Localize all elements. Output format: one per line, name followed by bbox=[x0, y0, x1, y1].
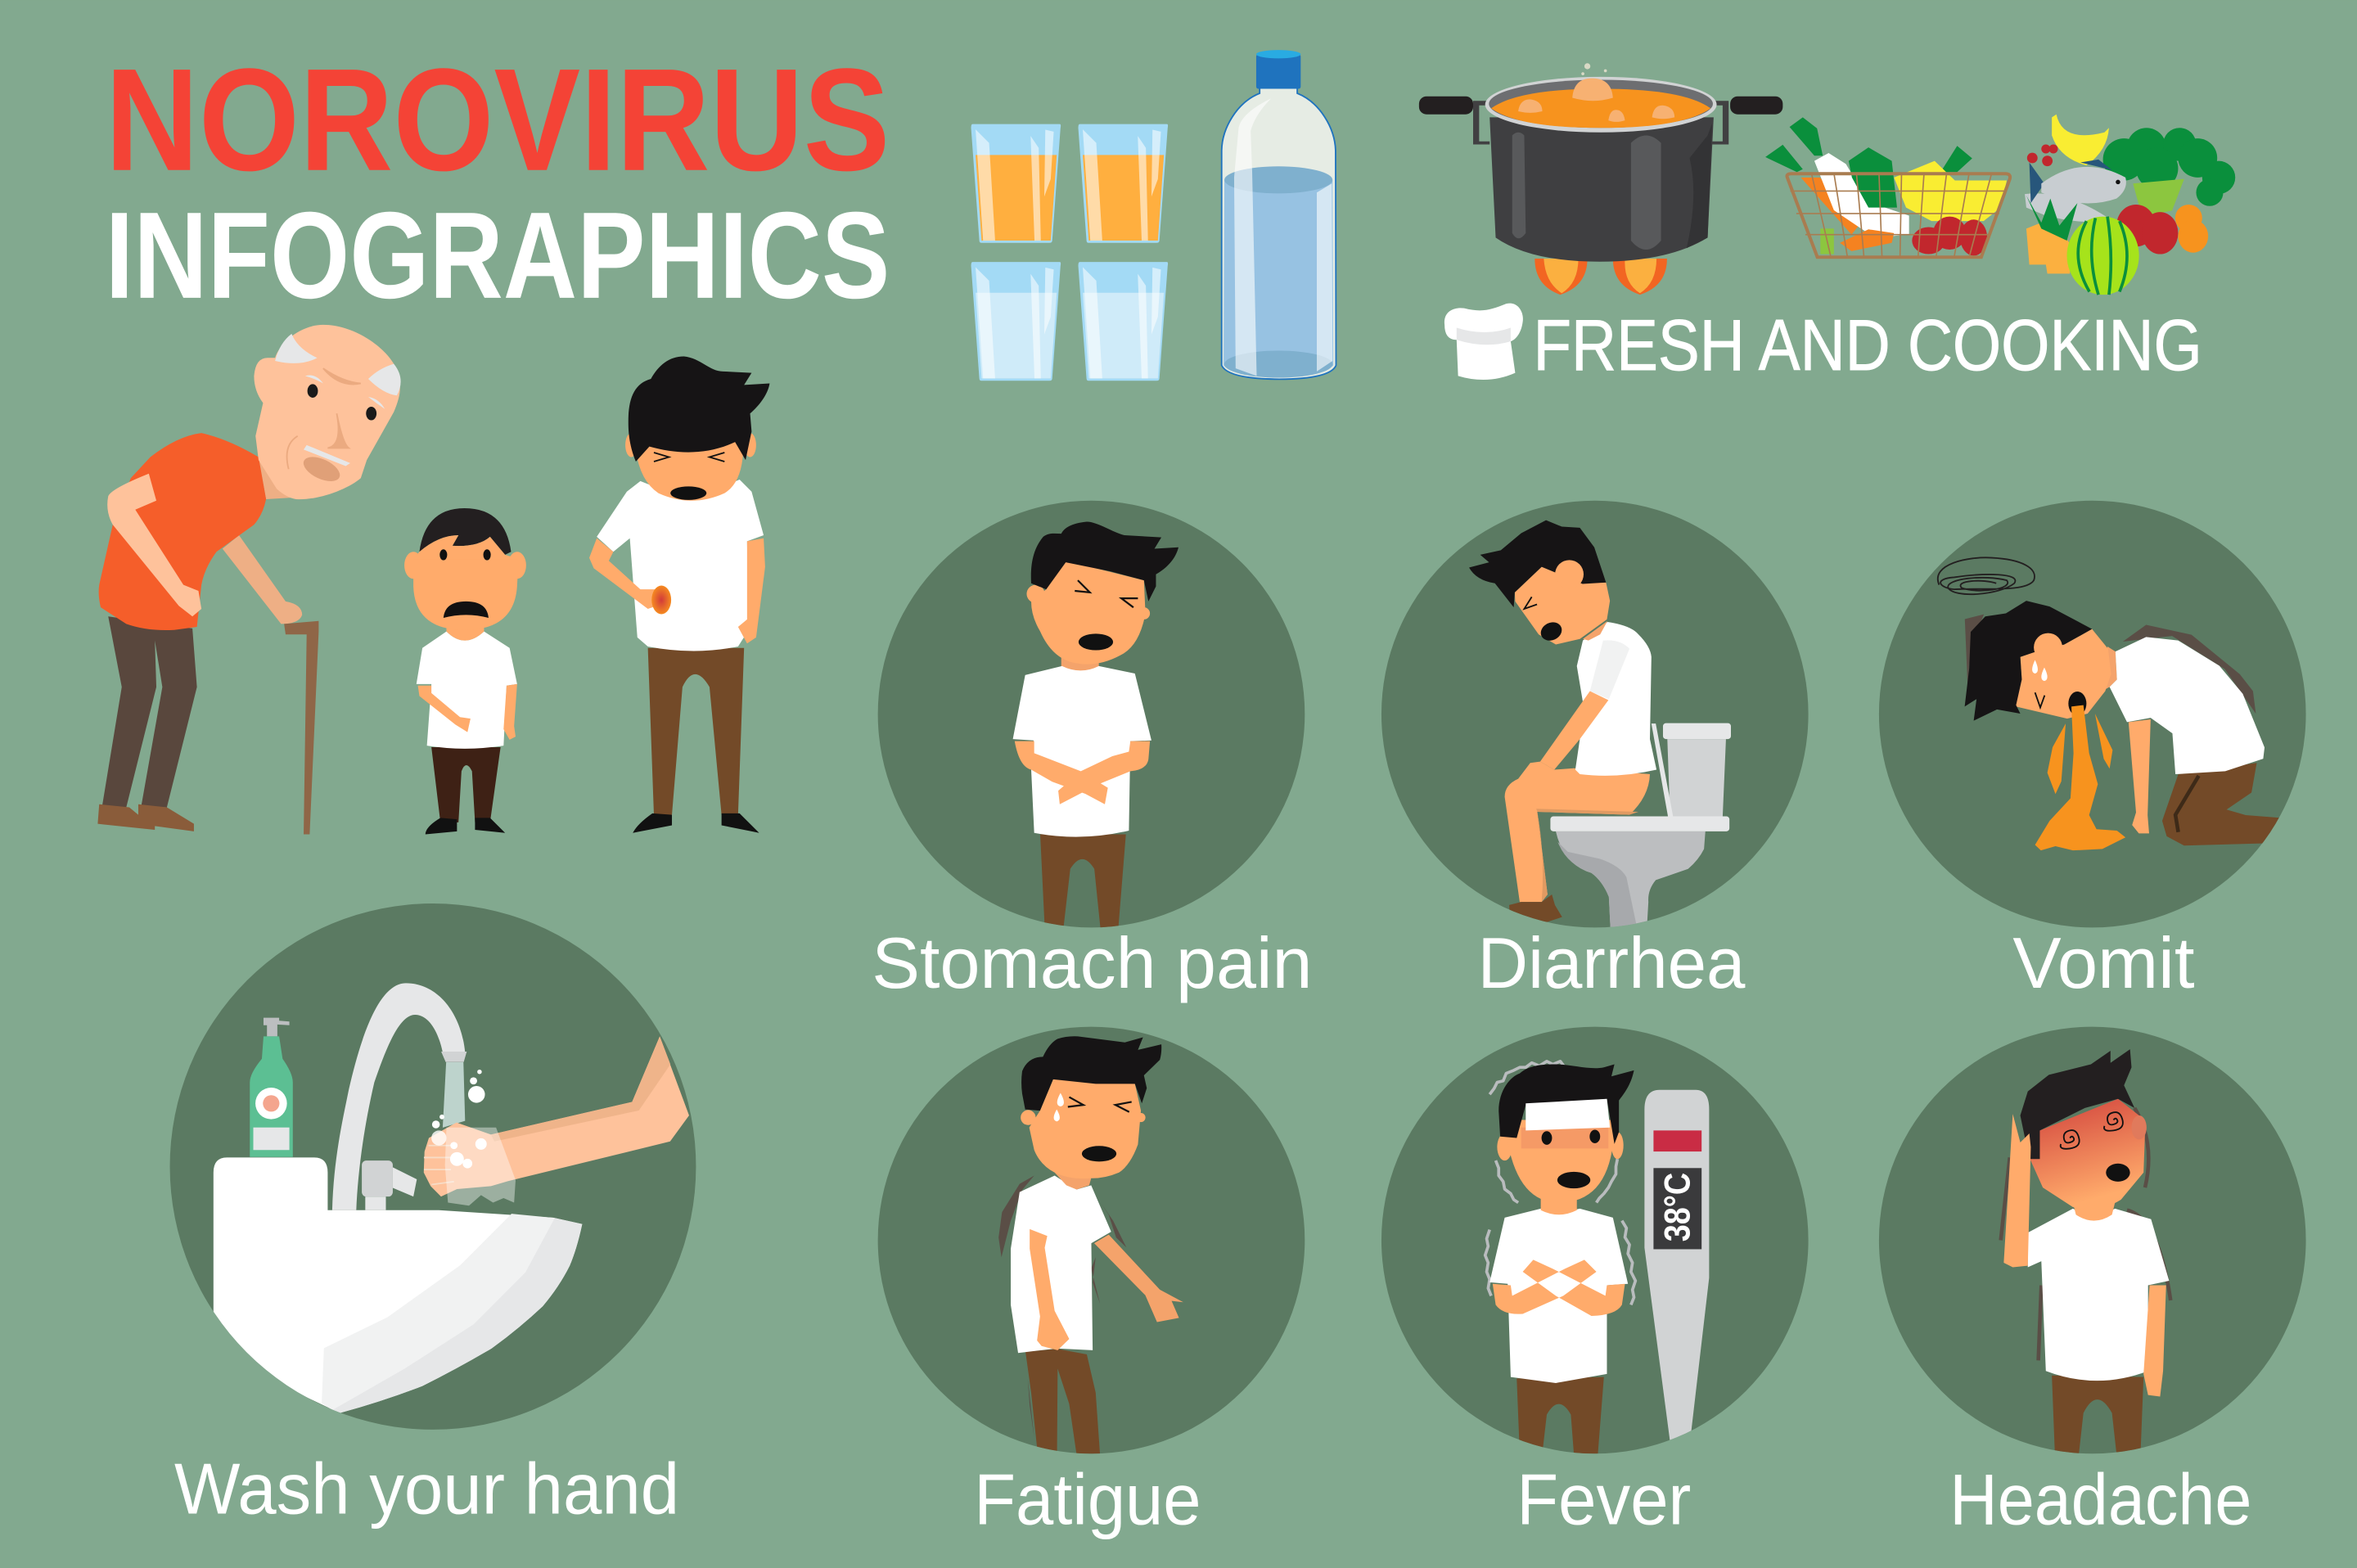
ears bbox=[1026, 585, 1150, 620]
panel: stomach pain bbox=[878, 501, 1305, 927]
mouth bbox=[300, 452, 344, 486]
ear bbox=[1555, 560, 1584, 583]
shadow lines bbox=[998, 1175, 1126, 1438]
bent arm bbox=[107, 474, 201, 616]
thermometer red bar bbox=[1653, 1130, 1701, 1151]
circle bbox=[1879, 501, 2306, 927]
trouser crease bbox=[2175, 776, 2199, 832]
arms bbox=[418, 684, 517, 740]
pump bbox=[264, 1018, 290, 1036]
neck bbox=[1055, 1173, 1091, 1190]
squinting eyes bbox=[654, 453, 724, 462]
circle bbox=[1381, 501, 1809, 927]
figure on toilet bbox=[1469, 520, 1731, 927]
upper fish bbox=[2041, 167, 2126, 203]
dizzy scribble bbox=[1938, 557, 2035, 594]
food pieces bbox=[1518, 79, 1674, 122]
hair bbox=[1031, 521, 1178, 602]
circle bbox=[170, 903, 696, 1430]
cane bbox=[284, 621, 318, 835]
hair bbox=[629, 356, 769, 462]
dark side bbox=[1687, 124, 1712, 248]
trousers bbox=[102, 616, 197, 807]
spout tip bbox=[441, 1052, 466, 1062]
shoes bbox=[633, 813, 759, 833]
shirt bbox=[1011, 1175, 1111, 1353]
panel: headache bbox=[1879, 1027, 2306, 1453]
trousers bbox=[1517, 1377, 1604, 1453]
neck bbox=[1583, 621, 1607, 641]
juice glass bbox=[1078, 124, 1168, 243]
steam bbox=[1581, 63, 1607, 75]
panel: fatigue bbox=[878, 1027, 1305, 1455]
figure with thermometer bbox=[1485, 1061, 1709, 1453]
ears bbox=[404, 552, 422, 579]
shoes bbox=[426, 818, 505, 835]
sweat drops bbox=[1054, 1093, 1064, 1121]
shiver lines bbox=[1485, 1061, 1635, 1304]
eyes bbox=[1075, 580, 1138, 607]
arm bbox=[1540, 691, 1608, 770]
handles bbox=[1419, 97, 1782, 144]
temperature reading: 38°C bbox=[1657, 1173, 1697, 1241]
lever stem bbox=[365, 1196, 385, 1210]
label: fever: Fever bbox=[1517, 1459, 1691, 1540]
mouth bbox=[2106, 1164, 2130, 1182]
face bbox=[1515, 567, 1610, 645]
arms bbox=[1015, 741, 1150, 804]
pineapple bbox=[2026, 223, 2070, 273]
illustration: man holding stomach bbox=[589, 356, 769, 833]
mouth bbox=[2068, 692, 2086, 715]
dark shadow lines bbox=[2001, 1108, 2170, 1360]
forearm shade bbox=[491, 1036, 670, 1142]
shirt bbox=[2028, 1209, 2169, 1381]
trousers bbox=[431, 747, 501, 822]
title bbox=[106, 38, 890, 324]
mouth bbox=[444, 602, 489, 618]
hair bbox=[1469, 520, 1606, 607]
vomit drops bbox=[2048, 714, 2112, 794]
face bbox=[1030, 1079, 1141, 1178]
white hair bbox=[275, 334, 401, 395]
eye bbox=[1524, 597, 1537, 609]
eyes bbox=[1542, 1129, 1600, 1145]
soup bbox=[1491, 89, 1710, 128]
shirt bbox=[99, 433, 266, 630]
label bbox=[253, 1128, 290, 1150]
circle bbox=[1879, 1027, 2306, 1453]
water bbox=[1224, 181, 1333, 377]
mouth bbox=[670, 486, 706, 500]
ear bbox=[2034, 633, 2062, 661]
shirt bbox=[1575, 622, 1656, 776]
hair bbox=[1021, 1036, 1161, 1111]
flames bbox=[1535, 259, 1667, 295]
label: wash your hand: Wash your hand bbox=[174, 1449, 679, 1530]
eyes bbox=[439, 549, 447, 561]
label: headache: Headache bbox=[1949, 1459, 2251, 1540]
hair bbox=[1498, 1065, 1634, 1144]
sink body bbox=[214, 1157, 582, 1413]
head bbox=[413, 556, 519, 630]
title line: norovirus: NOROVIRUS bbox=[106, 38, 890, 201]
mouth bbox=[1540, 622, 1562, 641]
icon: chef hat bbox=[1444, 304, 1523, 380]
light band bbox=[322, 1214, 555, 1410]
ears bbox=[625, 433, 638, 457]
highlights bbox=[1234, 98, 1332, 376]
panel: diarrhea bbox=[1381, 501, 1809, 927]
circle bbox=[1381, 1027, 1809, 1453]
back shadow bbox=[2123, 624, 2256, 714]
shoes bbox=[97, 804, 194, 831]
mouth bbox=[1082, 1146, 1116, 1161]
trousers bbox=[2052, 1376, 2143, 1453]
toilet tank lid bbox=[1663, 723, 1731, 739]
far arm bbox=[223, 535, 302, 624]
neck scoop bbox=[447, 620, 484, 641]
crossed arms bbox=[1493, 1259, 1625, 1316]
fresh food pile bbox=[2025, 115, 2235, 295]
apples bbox=[2116, 205, 2178, 255]
lever knob bbox=[362, 1160, 393, 1196]
panel: wash your hand bbox=[170, 903, 696, 1430]
ear bbox=[2131, 1115, 2147, 1139]
water glass bbox=[971, 262, 1061, 381]
trousers bbox=[648, 648, 744, 815]
upper fish fins bbox=[2030, 160, 2112, 203]
legs bbox=[1505, 762, 1650, 902]
fingers bbox=[424, 1146, 454, 1184]
moustache bbox=[304, 445, 350, 466]
watermelon bbox=[2067, 217, 2139, 295]
wrinkles bbox=[287, 368, 361, 469]
water bbox=[443, 1062, 465, 1128]
mouth bbox=[1557, 1172, 1590, 1188]
neck bbox=[1541, 1195, 1577, 1214]
radish bbox=[1814, 153, 1909, 237]
figure bbox=[2001, 1049, 2170, 1453]
toilet bowl shade bbox=[1557, 842, 1637, 927]
lowered arm bbox=[2143, 1286, 2166, 1396]
vomit stream bbox=[2035, 705, 2125, 850]
illustration: old man with cane bbox=[97, 325, 401, 835]
figure bbox=[998, 1036, 1183, 1455]
neck bbox=[1061, 658, 1099, 671]
panel: vomit bbox=[1879, 501, 2306, 927]
figure bbox=[1013, 521, 1178, 927]
shirt bbox=[1489, 1209, 1628, 1383]
shirt bbox=[2110, 637, 2265, 774]
bottle base bbox=[1224, 350, 1332, 378]
headband bbox=[1526, 1099, 1610, 1130]
brows bbox=[305, 376, 385, 409]
face bbox=[1505, 1120, 1615, 1203]
raised seat lid bbox=[1652, 723, 1673, 816]
bubbles bbox=[432, 1070, 485, 1129]
eye bbox=[2035, 692, 2044, 708]
shopping basket bbox=[1765, 117, 2010, 257]
thermometer display bbox=[1653, 1168, 1701, 1249]
bottom carrot bbox=[1840, 229, 1894, 251]
hair bbox=[1965, 601, 2092, 721]
neck bbox=[2102, 647, 2117, 692]
ears bbox=[1021, 1110, 1146, 1125]
toilet seat bbox=[1550, 816, 1729, 831]
figure vomiting bbox=[1938, 557, 2281, 850]
lettuce bbox=[2133, 179, 2184, 217]
face bbox=[2030, 1099, 2145, 1210]
carrot bbox=[1800, 178, 1860, 235]
cherries bbox=[2027, 144, 2057, 166]
raised arm bbox=[2003, 1114, 2030, 1268]
face bbox=[636, 429, 746, 501]
oranges bbox=[2175, 205, 2208, 253]
bananas bbox=[1894, 161, 2007, 221]
label: vomit: Vomit bbox=[2012, 922, 2195, 1003]
arm bbox=[589, 538, 765, 643]
faucet bbox=[332, 983, 466, 1210]
panel: fever bbox=[1381, 1027, 1809, 1453]
greens bbox=[1849, 147, 1897, 208]
pineapple leaves bbox=[2026, 196, 2077, 241]
eyes bbox=[308, 384, 318, 398]
body bbox=[250, 1036, 293, 1157]
forearm bbox=[424, 1036, 689, 1196]
leg shade bbox=[1536, 809, 1638, 902]
face bbox=[2015, 629, 2111, 719]
eyes bbox=[1068, 1097, 1132, 1112]
illustration: child bbox=[404, 508, 526, 835]
banana bbox=[2052, 115, 2109, 165]
glasses of juice and water bbox=[971, 124, 1168, 381]
head bbox=[254, 325, 400, 499]
trousers bbox=[2162, 763, 2281, 845]
face bbox=[1031, 561, 1146, 665]
heading: fresh and cooking: FRESH AND COOKING bbox=[1533, 304, 2202, 385]
title line: infographics: INFOGRAPHICS bbox=[106, 187, 890, 324]
forehead bbox=[413, 535, 519, 559]
hair bbox=[2021, 1049, 2134, 1159]
toilet tank bbox=[1667, 739, 1726, 817]
grey band bbox=[332, 1218, 582, 1413]
water bottle bbox=[1222, 50, 1336, 379]
hair bbox=[419, 508, 511, 555]
label: diarrhea: Diarrhea bbox=[1478, 922, 1746, 1003]
cap bbox=[1256, 50, 1300, 89]
pot body bbox=[1489, 117, 1714, 262]
shoe bbox=[1509, 894, 1562, 922]
bottle body bbox=[1222, 88, 1336, 379]
highlights bbox=[1512, 133, 1661, 250]
ears bbox=[1497, 1132, 1624, 1160]
soap bottle bbox=[250, 1018, 293, 1157]
trousers bbox=[1025, 1349, 1100, 1455]
apples bbox=[1912, 217, 1987, 255]
hair shadow bbox=[1965, 615, 1984, 687]
rim bbox=[1485, 77, 1717, 133]
neck bbox=[2073, 1203, 2115, 1221]
spout bbox=[332, 983, 465, 1210]
small green vegetable bbox=[1820, 228, 1834, 255]
toilet bowl bbox=[1556, 831, 1706, 927]
sleeve bbox=[1590, 640, 1629, 699]
shirt bbox=[597, 480, 764, 651]
broccoli bbox=[2103, 128, 2235, 206]
far arm bbox=[1094, 1235, 1183, 1322]
label: fatigue: Fatigue bbox=[974, 1459, 1201, 1540]
fold bbox=[1457, 328, 1511, 345]
lever handle bbox=[393, 1167, 417, 1196]
shirt bbox=[417, 632, 517, 749]
neck bbox=[259, 458, 291, 499]
label: stomach pain: Stomach pain bbox=[872, 922, 1312, 1003]
trousers bbox=[1040, 835, 1126, 927]
dizzy eyes bbox=[2061, 1112, 2123, 1149]
water surface bbox=[1224, 166, 1332, 193]
lower fish bbox=[2025, 193, 2111, 222]
juice glass bbox=[971, 124, 1061, 243]
fish eye bbox=[2116, 180, 2120, 184]
water glass bbox=[1078, 262, 1168, 381]
circle bbox=[878, 501, 1305, 927]
pain spot bbox=[651, 586, 671, 614]
near arm bbox=[1030, 1229, 1069, 1350]
flushed cheeks bbox=[1521, 1128, 1608, 1148]
mouth bbox=[1079, 633, 1113, 651]
circle bbox=[878, 1027, 1305, 1453]
hand emblem bbox=[255, 1088, 287, 1120]
arm bbox=[2129, 719, 2151, 833]
sink bbox=[214, 1157, 582, 1413]
cooking pot bbox=[1419, 63, 1782, 295]
shirt bbox=[1013, 666, 1151, 837]
thermometer body bbox=[1644, 1090, 1709, 1442]
hat bbox=[1444, 304, 1523, 380]
foam bbox=[431, 1128, 516, 1205]
leek tops bbox=[1765, 117, 1972, 172]
basket wire bbox=[1787, 173, 2010, 257]
sweat drops bbox=[2032, 660, 2048, 681]
